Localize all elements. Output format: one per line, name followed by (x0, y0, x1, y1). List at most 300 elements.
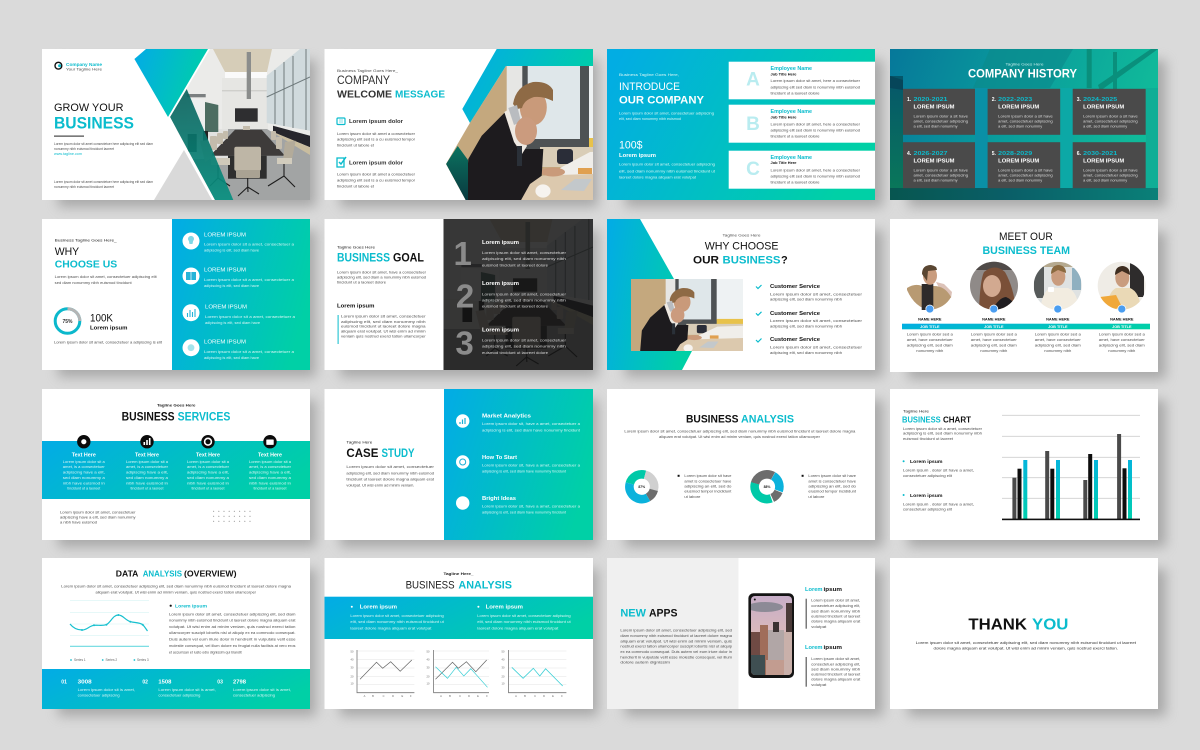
analysis text: Duis autem vel eum iriure dolor in hendrerit in vulputate velit esse (169, 638, 296, 642)
bright ideas (456, 496, 581, 515)
feature 1: ipsum (824, 587, 842, 593)
card 6: a elit, sed diam nonummy (1083, 178, 1127, 182)
title: GROW YOUR (54, 102, 124, 114)
donut: 75%: 75% (62, 319, 73, 325)
card C: tincidunt ut a laoreet dolore (770, 180, 820, 184)
line chart (70, 601, 149, 647)
title (54, 102, 134, 137)
analysis text (169, 604, 296, 654)
bright ideas: Lorem ipsum dolor sit, have a amet, consectetuer a (482, 504, 581, 508)
heading: YOU (1032, 616, 1068, 633)
heading: NEW (620, 607, 647, 619)
heading: COMPANY (337, 75, 390, 87)
company name: Company Name (66, 62, 103, 67)
donut text 1: amet is consectetuer have (684, 479, 731, 483)
heading: aliquam erat volutpat. Ut wisi enim ad minim veniam, quis nostrud exerci tation ullamcorper (96, 590, 257, 594)
card A (729, 62, 875, 99)
teal chevron shape (134, 49, 208, 117)
card 5: amet, consectetuer adipiscing (998, 173, 1053, 177)
item heading one: Lorem ipsum dolor (349, 119, 403, 125)
feature 1: consectetuer adipiscing elit, (811, 604, 860, 608)
card 5 (988, 142, 1060, 188)
portrait 4 (1097, 261, 1146, 311)
card 3 (1073, 89, 1146, 135)
line chart 1: A (364, 694, 366, 698)
grey panel (607, 558, 738, 709)
stat 100K: 100K (90, 313, 114, 325)
donut text 2 (802, 474, 857, 499)
line chart 2: A (440, 694, 442, 698)
company name (66, 62, 103, 71)
feature 4: Lorem ipsum dolor sit a amet, consectetuer a (204, 350, 295, 354)
analysis text: Lorem ipsum (175, 604, 208, 610)
card B: B (746, 114, 760, 135)
heading: WELCOME (337, 88, 392, 100)
heading: SERVICES (178, 412, 231, 424)
service 2: Lorem ipsum dolor sit amet, consectetuer (770, 319, 863, 323)
card 4: Lorem ipsum dolor a sit have (914, 168, 968, 172)
card B: adipiscing elit sed diam is nonummy nibh euismod (770, 128, 860, 132)
stat 02 (142, 680, 216, 697)
market analytics: Lorem ipsum dolor sit, have a amet, consectetuer a (482, 422, 581, 426)
donut chart 1 (625, 470, 659, 504)
feature 1 (182, 232, 295, 253)
card 1: amet, consectetuer adipiscing (914, 119, 968, 123)
description: diam nonummy nibh euismod tincidunt ut laoreet dolore magna (620, 634, 733, 638)
line chart 1 (351, 650, 414, 698)
card 2: Lorem ipsum dolor a sit have (998, 114, 1053, 118)
stat 01: consectetuer adipiscing (78, 693, 120, 697)
feature 2: Lorem ipsum dolor sit a amet, consectetuer a (204, 278, 295, 282)
goal 1: adipiscing elit, sed diam nonummy nibh (482, 257, 566, 261)
portrait 3 (1033, 261, 1082, 311)
card 2: LOREM IPSUM (998, 105, 1039, 111)
line chart 1: C (383, 694, 385, 698)
line chart 1: E (402, 694, 404, 698)
gradient band (42, 441, 310, 499)
heading: WHY (55, 246, 80, 258)
feature 4: adipiscing is elit, sed diam have (204, 356, 259, 360)
heading (620, 607, 678, 619)
heading: OUR (693, 254, 719, 266)
slide 13: data analysis overview (42, 558, 310, 709)
slide 2: welcome message (324, 49, 593, 200)
bright ideas: Bright Ideas (482, 496, 516, 502)
heading: DATA (116, 569, 138, 579)
goal 2: 2 (456, 277, 474, 314)
card 5: LOREM IPSUM (998, 159, 1039, 165)
heading: (OVERVIEW) (184, 569, 237, 579)
card 6: LOREM IPSUM (1083, 159, 1124, 165)
member 3 (1035, 316, 1082, 353)
legend item 2 (903, 493, 974, 512)
bar chart (1002, 415, 1140, 520)
heading: STUDY (382, 446, 414, 460)
legend item 2: Lorem ipsum . dolor sit have a amet, (903, 502, 974, 506)
member 4: NAME HERE (1110, 316, 1134, 321)
card 3: LOREM IPSUM (1083, 105, 1124, 111)
heading (982, 231, 1070, 257)
service column 3: Lorem ipsum dolor sit a (187, 460, 230, 464)
lorem block: Lorem ipsum dolor sit amet, consectetuer (341, 315, 426, 319)
line chart 3: B (524, 694, 526, 698)
heading: APPS (649, 607, 678, 619)
feature 2 (805, 645, 861, 687)
member 1: adipiscing elit, sed diam (907, 344, 953, 348)
service column 3: nibh have euismod in (187, 481, 229, 485)
feature 2: Lorem (805, 645, 823, 651)
heading: Tagline Goes Here (157, 404, 196, 408)
lorem block: adipiscing elit, sed diam nonummy nibh (341, 320, 426, 324)
feature 2: consectetuer adipiscing elit, (811, 662, 860, 666)
line chart 2: C (459, 694, 461, 698)
service column 3: adipiscing have a elit, (187, 471, 229, 475)
item heading two: Lorem ipsum dolor (349, 160, 403, 166)
feature 1: Lorem ipsum dolor sit a amet, consectetuer a (204, 243, 295, 247)
card 3: amet, consectetuer adipiscing (1083, 119, 1138, 123)
line chart 3: 30 (502, 666, 505, 670)
band item 1: laoreet dolore magna aliquam erat volutpat (350, 626, 432, 630)
how to start: Lorem ipsum dolor sit, have a amet, consectetuer a (482, 463, 581, 467)
band item 1 (350, 604, 445, 630)
service column 3: tincidunt ut a laoreet (192, 486, 225, 490)
portrait 1 (907, 265, 952, 310)
badges (926, 305, 1126, 313)
heading: Business Tagline Goes Here_ (337, 69, 399, 73)
heading (337, 246, 427, 285)
line chart 2: F (486, 694, 488, 698)
service column 3: amet, is a consectetuer (187, 465, 230, 469)
stat 03: 03 (217, 680, 223, 686)
feature 3 (182, 304, 296, 325)
service column 4: tincidunt ut a laoreet (254, 486, 287, 490)
dark room photo (438, 219, 598, 370)
goal 1: euismod tincidunt ut laoreet dolore (482, 263, 548, 267)
member 3: JOB TITLE (1048, 325, 1068, 329)
service column 2 (126, 435, 169, 490)
text block: adipiscing elit, sed diam nonummy nibh euismod (346, 471, 434, 475)
card B: tincidunt ut a laoreet dolore (770, 135, 820, 139)
line chart 1: 40 (351, 657, 354, 661)
item text two: adipiscing elit sed is a cu euismod tempor (337, 178, 416, 182)
heading: euismod tincidunt ut laoreet (903, 437, 954, 441)
slide 5: why choose us (42, 219, 310, 370)
line chart 2: 20 (427, 675, 430, 679)
heading: Lorem ipsum dolor sit amet, consectetuer adipiscing elit, sed diam nonummy nibh euismod tincidunt ut laoreet dolore magna (624, 429, 856, 433)
card 5: Lorem ipsum dolor a sit have (998, 168, 1053, 172)
grey triangle (154, 150, 212, 200)
card 5: 5. (992, 151, 996, 157)
legend item 1: Lorem ipsum . dolor sit have a amet, (903, 469, 974, 473)
card C: adipiscing elit sed diam is nonummy nibh euismod (770, 174, 860, 178)
heading: Tagline Here (346, 440, 372, 444)
service column 1: adipiscing have a elit, (63, 471, 105, 475)
card 2: amet, consectetuer adipiscing (998, 119, 1053, 123)
feature 1: volutpat (811, 625, 827, 629)
heading: ANALYSIS (143, 569, 182, 579)
heading: Lorem ipsum dolor sit amet, consectetuer adipiscing elit (55, 275, 158, 279)
card C: Job Title Here (770, 161, 796, 165)
service column 2: Lorem ipsum dolor sit a (126, 460, 169, 464)
legend item 1 (903, 459, 974, 478)
slide 15: new apps (607, 558, 875, 709)
stat 03: 2798 (233, 680, 246, 686)
footer text: nonummy nibh euismod tincidunt laoreet (54, 185, 115, 189)
band item 2 (477, 604, 572, 630)
card C (729, 151, 875, 189)
heading: GOAL (393, 253, 424, 265)
chart legend: Series 1 (74, 658, 86, 662)
member 4: adipiscing elit, sed diam (1099, 344, 1145, 348)
donut text 1: adipiscing an elit, sed do (684, 484, 731, 488)
item text one (337, 132, 416, 148)
man on phone photo (446, 66, 593, 200)
line chart 3: 20 (502, 675, 505, 679)
service 3 (756, 337, 863, 355)
feature 1: Lorem (805, 587, 823, 593)
intro text: Lorem ipsum dolor sit amet consectetuer here adipiscing elit sed diam (54, 142, 153, 146)
band item 2: Lorem ipsum dolor sit amet, consectetuer adipiscing (477, 614, 571, 618)
card 2: 2022-2023 (998, 97, 1032, 103)
heading (61, 569, 292, 594)
heading: BUSINESS (122, 412, 175, 424)
analysis text: molestie consequat, vel illum dolore eu feugiat nulla facilisis at vero eros (169, 644, 296, 648)
slide 6: business goal (324, 219, 598, 370)
legend item 2: consectetuer adipiscing elit (903, 508, 953, 512)
stat 100K: Lorem ipsum (90, 326, 128, 332)
band item 1: Lorem ipsum (360, 604, 398, 610)
service column 2: amet, is a consectetuer (126, 465, 169, 469)
legend item 1: Lorem ipsum (910, 459, 942, 465)
stat 03: Lorem ipsum dolor sit is amet, (233, 688, 291, 692)
service 2: adipiscing elit, sed diam nonummy nibh (770, 324, 842, 328)
legend item 2: Lorem ipsum (910, 493, 942, 499)
service 1 (756, 284, 863, 302)
card 5: 2028-2029 (998, 151, 1032, 157)
line chart 1: 20 (351, 675, 354, 679)
band item 1: Lorem ipsum dolor sit amet, consectetuer adipiscing (350, 614, 444, 618)
feature 2: dolore magna aliquam erat (811, 678, 861, 682)
slide 11: business analysis donuts (607, 389, 875, 540)
analysis text: et accumsan et iusto odio dignissim qui blandit (169, 650, 242, 654)
lorem block (337, 304, 427, 344)
heading: CASE (346, 446, 378, 460)
footer text (60, 510, 136, 525)
line chart 3: D (543, 694, 545, 698)
feature 2: LOREM IPSUM (204, 268, 246, 274)
member 2: nonummy nibh (980, 349, 1007, 353)
heading: BUSINESS (686, 414, 738, 426)
price block: elit, sed diam nonummy nibh euismod tincidunt ut (619, 169, 716, 173)
line chart 2: 50 (427, 650, 430, 654)
goal 1: 1 (454, 235, 472, 272)
line chart 2: B (449, 694, 451, 698)
heading: sed diam nonummy nibh euismod tincidunt (55, 281, 133, 285)
donut text 2: amet is consectetuer have (808, 479, 856, 483)
goal 1: Lorem ipsum (482, 240, 519, 246)
line chart 1: 50 (351, 650, 354, 654)
icon: message (337, 118, 345, 124)
heading: Tagline Goes Here (722, 234, 760, 238)
service column 4: adipiscing have a elit, (249, 471, 291, 475)
feature 1: euismod tincidunt ut laoreet (811, 615, 861, 619)
intro text: nonummy nibh euismod tincidunt laoreet (54, 147, 115, 151)
line chart 1: F (410, 694, 412, 698)
line chart 2: 30 (427, 666, 430, 670)
description: dolore autem dignissim (620, 661, 670, 665)
chart legend: Series 2 (106, 658, 117, 662)
donut text 2: eiusmod tempor incididunt (808, 490, 857, 494)
analysis text: ullamcorper suscipit lobortis nisl ut aliquip ex ea commodo consequat. (169, 631, 296, 635)
heading: Tagline Here_ (444, 572, 475, 576)
stat 02: 02 (142, 680, 148, 686)
description: nostrud exerci tation ullamcorper suscipit lobortis nisl ut aliquip (620, 645, 732, 649)
feature 2: Lorem ipsum dolor sit amet, (811, 657, 860, 661)
member 4 (1099, 316, 1146, 353)
card 6: 2030-2021 (1083, 151, 1117, 157)
goal 3: Lorem ipsum (482, 328, 519, 334)
member 3: nonummy nibh (1044, 349, 1071, 353)
slide 12: business chart (890, 389, 1158, 540)
stat 03 (217, 680, 291, 697)
item text two: tincidunt ut labore et (337, 185, 375, 189)
item text one: Lorem ipsum dolor sit amet a consectetuer (337, 132, 416, 136)
card 6: 6. (1077, 151, 1081, 157)
service column 2: adipiscing have a elit, (126, 471, 168, 475)
service column 1: nibh have euismod in (63, 481, 105, 485)
icon: check box (337, 157, 346, 167)
heading: CHART (943, 415, 971, 424)
phone mockup (747, 593, 794, 678)
stat 01: 3008 (78, 680, 92, 686)
member 2: amet, have consectetuer (971, 338, 1018, 342)
analysis text: volutpat. Ut wisi enim ad minim veniam, quis nostrud exerci tation (169, 625, 296, 629)
service column 4: Text Here (258, 452, 282, 458)
band item 1: elit, sed diam nonummy nibh euismod tincidunt ut (350, 620, 445, 624)
feature 2: adipiscing is elit, sed diam have (204, 284, 259, 288)
item text one: adipiscing elit sed is a cu euismod tempor (337, 137, 416, 141)
heading: Tagline Goes Here (337, 246, 375, 250)
feature 2: volutpat (811, 683, 827, 687)
heading: adipiscing is elit, sed diam nonummy nibh (903, 432, 982, 436)
service column 4: Lorem ipsum dolor sit a (249, 460, 292, 464)
goal 2: euismod tincidunt ut laoreet dolore (482, 305, 548, 309)
heading: THANK (968, 616, 1027, 633)
lorem block: veniam quis nostrud exerci tation ullamcorper (341, 335, 426, 339)
band item 2: laoreet dolore magna aliquam erat volutpat (477, 626, 559, 630)
how to start (456, 455, 581, 473)
tinted office photo (890, 49, 1158, 200)
stat 100K (54, 313, 163, 344)
stat 02: 1508 (158, 680, 172, 686)
slide 8: meet our team (890, 219, 1158, 372)
service column 3 (187, 435, 230, 490)
donut text 1: Lorem ipsum dolor sit have (684, 474, 731, 478)
footer text (54, 180, 153, 189)
slide 14: business analysis line charts (324, 558, 593, 709)
heading: MESSAGE (395, 88, 445, 100)
price block: Lorem ipsum dolor sit amet, consectetuer adipiscing (619, 163, 715, 167)
band item 2: Lorem ipsum (486, 604, 524, 610)
line chart 3: E (552, 694, 554, 698)
feature 3: Lorem ipsum dolor sit a amet, consectetuer a (205, 315, 296, 319)
card 6 (1073, 142, 1146, 188)
heading: Tagline Here (903, 410, 929, 414)
heading: CHOOSE US (55, 259, 117, 271)
closing text: Lorem ipsum dolor sit amet, consectetuer adipiscing elit, sed diam nonummy nibh euismod tincidunt ut laoreet (916, 641, 1137, 645)
card C: Employee Name (770, 155, 812, 161)
line chart 1: B (372, 694, 374, 698)
service column 4: sed diam nonummy a (249, 476, 292, 480)
card 4: 2026-2027 (914, 151, 948, 157)
donut text 1: ut labore (684, 495, 700, 499)
closing text: dolore magna aliquam erat volutpat. Ut wisi enim ad minim veniam, quis nostrud exerci tation. (934, 647, 1118, 651)
card A: tincidunt ut a laoreet dolore (770, 92, 820, 96)
description (620, 629, 733, 665)
member 4: nonummy nibh (1108, 349, 1135, 353)
service column 4: amet, is a consectetuer (249, 465, 292, 469)
price block: laoreet dolore magna aliquam erat volutpat (619, 176, 697, 180)
meeting room photo (165, 49, 315, 200)
gradient band (324, 597, 593, 639)
footer text: Lorem ipsum dolor sit amet consectetuer here adipiscing elit sed diam (54, 180, 153, 184)
service 2 (756, 311, 863, 328)
market analytics: Market Analytics (482, 414, 531, 420)
card 4: a elit, sed diam nonummy (914, 178, 958, 182)
stat 01: 01 (61, 680, 67, 686)
heading: aliquam erat volutpat. Ut wisi enim ad minim veniam, quis nostrud exerci tation ullamcorper (659, 435, 821, 439)
heading: BUSINESS (337, 253, 390, 265)
donut text 2: ut labore (808, 495, 824, 499)
donut chart 2 (750, 470, 784, 504)
band item 2: elit, sed diam nonummy nibh euismod tincidunt ut (477, 620, 572, 624)
slide 7: why choose our business (607, 219, 875, 370)
card A: Employee Name (770, 66, 812, 72)
card C: Lorem ipsum dolor sit amet, here a consectetuer (770, 168, 861, 172)
price block (619, 140, 716, 180)
card 6: Lorem ipsum dolor a sit have (1083, 168, 1138, 172)
goal 3: adipiscing elit, sed diam nonummy nibh (482, 345, 566, 349)
heading (346, 440, 414, 460)
heading: Lorem ipsum dolor sit a amet, consectetuer (903, 427, 983, 431)
service column 2: tincidunt ut a laoreet (130, 486, 164, 490)
text block: Lorem ipsum dolor sit amet, consectetuer (346, 465, 435, 469)
card 1: a elit, sed diam nonummy (914, 124, 958, 128)
card 1: 2020-2021 (914, 97, 948, 103)
heading (624, 414, 856, 439)
line chart 1: D (392, 694, 394, 698)
description: hendrerit in vulputate velit esse molestie consequat, vel illum (620, 655, 732, 659)
goal 1 (454, 235, 567, 272)
member 1 (907, 316, 954, 353)
description: ex ea commodo consequat. Duis autem vel eum iriure dolor in (620, 650, 732, 654)
line chart 3: 50 (502, 650, 505, 654)
heading: BUSINESS (722, 254, 780, 266)
service column 2: Text Here (135, 452, 159, 458)
heading (122, 404, 231, 424)
heading: ANALYSIS (741, 414, 794, 426)
heading: BUSINESS TEAM (982, 245, 1070, 257)
member 3: adipiscing elit, sed diam (1035, 344, 1081, 348)
item text one: tincidunt ut labore et (337, 144, 375, 148)
feature 2 (182, 268, 295, 288)
line chart 3: 10 (502, 682, 505, 686)
heading (693, 234, 788, 266)
donut text 2: Lorem ipsum dolor sit have (808, 474, 856, 478)
card A: adipiscing elit sed diam is nonummy nibh euismod (770, 85, 860, 89)
stat 02: consectetuer adipiscing (158, 693, 200, 697)
member 1: nonummy nibh (916, 349, 943, 353)
